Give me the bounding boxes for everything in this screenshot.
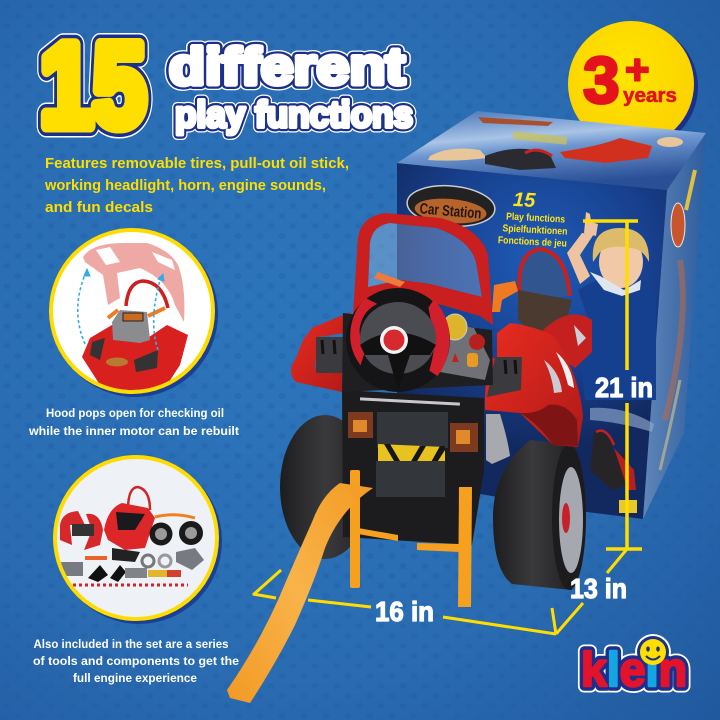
heading number 15: 15 — [40, 20, 146, 152]
box text: Fonctions de jeu — [498, 235, 567, 250]
hazard stripe — [376, 444, 445, 497]
circle: hood pops open — [49, 228, 218, 397]
features text — [44, 156, 349, 216]
dashed arrows — [78, 272, 161, 350]
right fender — [485, 323, 583, 447]
features text: Features removable tires, pull-out oil stick, — [45, 156, 349, 172]
silver engine part — [486, 414, 510, 464]
child on box — [567, 212, 656, 400]
width dimension: 16 in — [375, 596, 434, 627]
mini toy on box — [518, 249, 592, 368]
heading number 15: 15 — [40, 20, 146, 152]
orange peg — [492, 281, 518, 312]
left fender — [291, 312, 350, 392]
klein logo: klein — [581, 644, 687, 697]
stand — [350, 470, 472, 607]
heading text: different — [169, 38, 405, 96]
features text: working headlight, horn, engine sounds, — [44, 178, 326, 194]
box text: Play functions — [506, 211, 566, 226]
heading text: different — [169, 38, 405, 96]
height dimension: 21 in — [595, 372, 653, 403]
age badge — [568, 21, 698, 150]
heading text — [169, 38, 413, 135]
orange ramp — [227, 483, 373, 703]
age badge: years — [623, 85, 677, 107]
heading number 15: 15 — [40, 20, 146, 152]
caption: parts: Also included in the set are a series — [34, 637, 229, 651]
box highlight and lower mini toy — [590, 408, 654, 513]
engine panel — [348, 397, 478, 452]
chassis — [342, 390, 484, 545]
box text: Spielfunktionen — [502, 223, 568, 238]
box faces — [397, 111, 706, 519]
box right artwork — [660, 170, 695, 470]
heading text: play functions — [175, 94, 413, 135]
left wheel — [280, 415, 370, 559]
caption: parts: of tools and components to get the — [33, 654, 239, 668]
steering wheel — [346, 288, 450, 392]
width dimension: 13 in — [570, 573, 627, 604]
caption: hood: Hood pops open for checking oil — [46, 406, 224, 420]
caption: parts — [33, 637, 239, 685]
width dimension — [253, 549, 627, 634]
circle: parts — [53, 455, 222, 624]
windshield frame — [353, 213, 493, 325]
age badge: + — [625, 46, 650, 93]
caption: hood: while the inner motor can be rebuilt — [28, 424, 239, 438]
klein logo: klein — [581, 644, 687, 697]
box logo: Car Station — [419, 200, 482, 223]
heading text: play functions — [175, 94, 413, 135]
caption: hood — [28, 406, 239, 438]
box text — [498, 188, 570, 250]
toy car — [280, 213, 586, 607]
box logo — [405, 182, 497, 230]
heading text: play functions — [175, 94, 413, 135]
age badge: 3 — [583, 43, 620, 117]
dashboard — [342, 313, 493, 392]
heading text: different — [169, 38, 405, 96]
caption: parts: full engine experience — [73, 671, 197, 685]
box top artwork — [428, 117, 683, 170]
features text: and fun decals — [45, 200, 153, 216]
klein logo: klein — [581, 644, 687, 697]
product box — [397, 111, 706, 519]
right wheel — [493, 440, 586, 590]
box text: 15 — [512, 189, 537, 212]
